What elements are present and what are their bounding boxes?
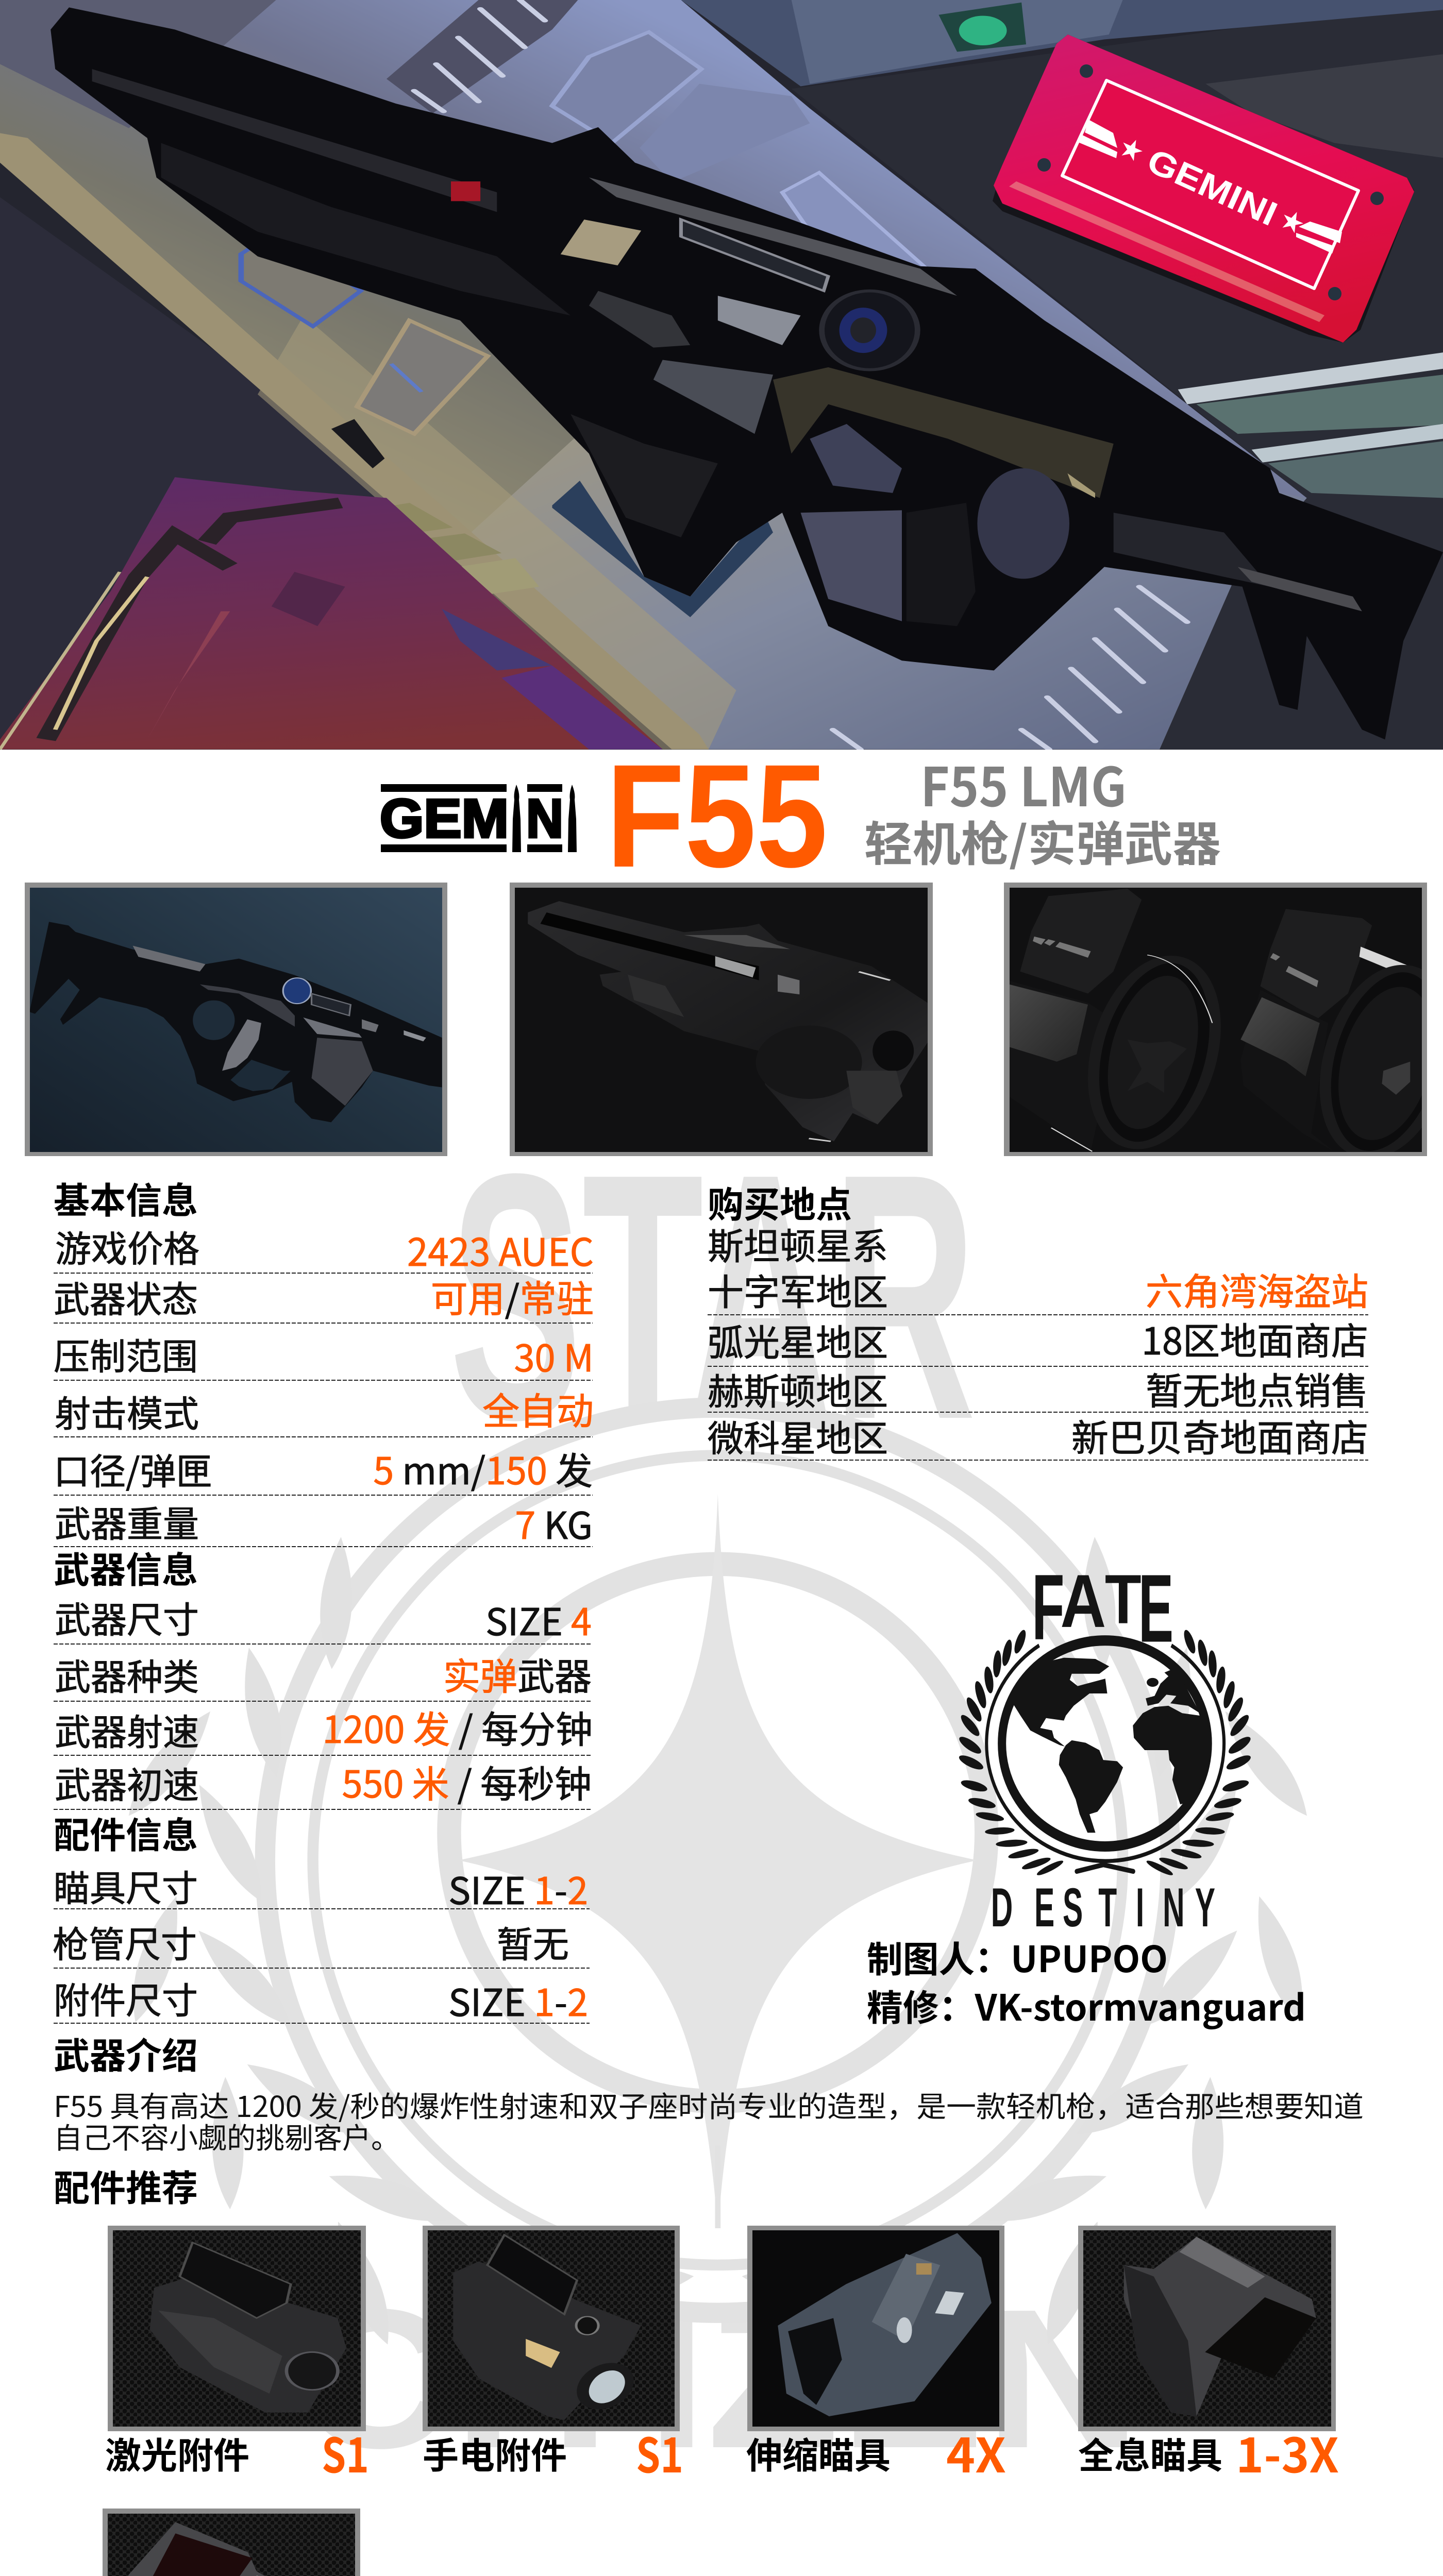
main grey crate [0,0,1307,749]
panel: weapon info: SIZE 4 [485,1592,592,1646]
card: holographic sight: 1-3X [1236,2418,1339,2486]
text block: weapon intro: 自己不容小觑的挑剔客户。 [54,2115,400,2157]
thumbnail: ammo drums [1004,883,1443,1160]
card: holographic sight: 全息瞄具 [1078,2427,1222,2479]
subtitle: weapon type: 轻机枪/实弹武器 [864,806,1221,875]
panel: weapon info: 武器初速 [55,1757,199,1809]
panel: basic info: 武器状态 [54,1271,198,1323]
panel: basic info: 可用/常驻 [431,1269,594,1323]
panel: basic info: 7 KG [515,1496,593,1550]
panel: attachment info [53,1807,590,2027]
gemini logo: N [526,788,563,849]
text block: weapon intro: F55 具有高达 1200 发/秒的爆炸性射速和双子座时尚专业的造型，是一款轻机枪，适合那些想要知道 [54,2084,1364,2126]
hero image: gun on cargo crates [0,0,1443,750]
panel: basic info: 武器重量 [55,1496,199,1548]
tan bars behind purple crate [395,503,452,532]
panel: weapon info: 1200 发 / 每分钟 [323,1700,593,1754]
panel: basic info: 射击模式 [55,1385,199,1437]
crate vent slots [387,0,578,113]
panel: purchase locations: 18区地面商店 [1142,1311,1368,1365]
heading: weapon info: 武器信息 [54,1541,198,1594]
red gemini plate: GEMINI [1142,141,1283,233]
credits [867,1931,1306,2031]
card: flashlight attachment: 手电附件 [423,2427,567,2479]
panel: attachment info: 瞄具尺寸 [54,1860,198,1912]
panel: weapon info [54,1541,593,1809]
card: laser attachment [105,2226,369,2486]
panel: basic info: 2423 AUEC [407,1222,594,1277]
heading: purchase locations: 购买地点 [708,1176,852,1228]
logo: fate destiny emblem: DESTINY [991,1877,1215,1939]
crate recessed panels [552,32,701,143]
panel: attachment info: SIZE 1-2 [448,1861,588,1915]
text block: weapon intro [54,2084,1364,2157]
logo: fate destiny emblem: T [1105,1560,1142,1638]
heading: recommended attachments: 配件推荐 [54,2160,198,2212]
panel: basic info: 全自动 [482,1381,594,1435]
logo: fate destiny emblem [958,1554,1252,1939]
gun silhouette [51,7,1443,739]
credits: 制图人：UPUPOO [867,1931,1168,1983]
heading: basic info: 基本信息 [54,1172,198,1224]
grip [907,503,976,626]
card: laser attachment: S1 [322,2418,369,2486]
card: telescopic sight: 伸缩瞄具 [746,2427,891,2479]
card: reflex sight [103,2509,360,2576]
red caution label [451,181,480,201]
metal rails right [1178,352,1443,404]
subtitle: F55 LMG: F55 LMG [920,744,1127,822]
panel: weapon info: 武器尺寸 [55,1591,199,1643]
scratched dark floor [0,197,374,739]
gun barrel highlights [92,69,497,212]
panel: attachment info: 附件尺寸 [54,1972,198,2024]
panel: weapon info: 武器射速 [55,1704,199,1756]
credits: 精修：VK-stormvanguard [867,1979,1306,2031]
title: F55: F55 [606,734,828,898]
red gemini plate: ★ [1115,128,1150,168]
card: flashlight attachment: S1 [636,2418,683,2486]
watermark: star citizen emblem: STAR [449,1101,976,1493]
watermark: star citizen emblem: CITIZEN [296,2267,1142,2489]
purple ammo crate [0,477,663,749]
panel: purchase locations: 十字军地区 [708,1264,888,1316]
panel: weapon info: 武器种类 [55,1649,199,1701]
card: laser attachment: 激光附件 [105,2427,249,2479]
thumbnail: full gun on blue [25,883,447,1156]
panel: purchase locations: 赫斯顿地区 [708,1363,888,1415]
watermark: star citizen emblem [116,1101,1319,2489]
logo: fate destiny emblem: F [1032,1555,1064,1659]
stock hole [977,468,1069,579]
panel: basic info: 游戏价格 [55,1221,199,1273]
panel: basic info: 5 mm/150 发 [373,1441,593,1495]
panel: purchase locations: 六角湾海盗站 [1146,1262,1368,1316]
tech crates upper middle [681,0,1443,86]
trigger guard opening [810,424,902,493]
panel: basic info: 口径/弹匣 [54,1443,212,1495]
logo: fate destiny emblem: A [1060,1558,1106,1643]
heading: attachment info: 配件信息 [54,1807,198,1859]
gold heat exchanger [561,219,641,265]
panel: attachment info: 暂无 [497,1916,569,1968]
card: flashlight attachment [423,2226,683,2486]
panel: purchase locations: 新巴贝奇地面商店 [1071,1408,1368,1462]
gemini logo [380,784,577,852]
dark metal plate upper right [792,0,1443,749]
panel: purchase locations [708,1176,1368,1462]
card: telescopic sight [746,2226,1006,2486]
panel: weapon info: 实弹武器 [443,1647,592,1701]
panel: basic info: 压制范围 [54,1328,198,1380]
gemini logo: GEM [380,788,509,849]
panel: purchase locations: 弧光星地区 [708,1314,888,1366]
heading: weapon intro: 武器介绍 [54,2027,198,2079]
panel: basic info [54,1172,594,1550]
panel: weapon info: 550 米 / 每秒钟 [342,1754,592,1808]
panel: purchase locations: 微科星地区 [708,1410,888,1462]
panel: attachment info: SIZE 1-2 [448,1973,588,2027]
panel: purchase locations: 暂无地点销售 [1146,1361,1368,1415]
panel: attachment info: 枪管尺寸 [53,1916,197,1968]
red gemini plate: ★ [1276,200,1311,240]
card: holographic sight [1078,2226,1339,2486]
card: telescopic sight: 4X [946,2418,1006,2486]
carbon gold section [773,367,1114,498]
logo: fate destiny emblem: E [1138,1554,1173,1662]
panel: basic info: 30 M [514,1328,594,1382]
holographic sticker [552,481,773,617]
side wheel [822,291,917,370]
red gemini plate [993,35,1414,343]
panel: purchase locations: 斯坦顿星系 [708,1218,888,1270]
thumbnail: front gun on black [510,883,933,1156]
